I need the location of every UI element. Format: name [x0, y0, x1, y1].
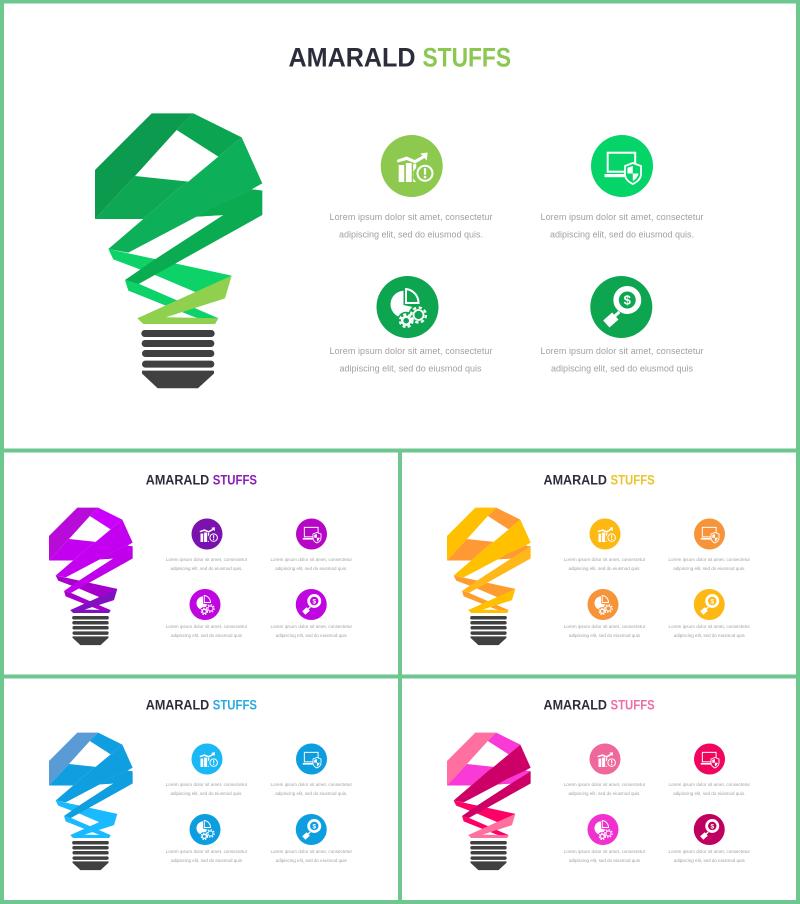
text: item three: adipiscing elit, sed do eiusmod quis: [569, 858, 641, 863]
text: item three: Lorem ipsum dolor sit amet, consectetur: [166, 849, 248, 854]
icon: dollar magnifier: [296, 589, 327, 620]
icon: dollar magnifier: $: [710, 598, 714, 605]
text: item four: Lorem ipsum dolor sit amet, consectetur: [668, 849, 750, 854]
light bulb ribbon illustration: [49, 733, 133, 870]
text: item two: Lorem ipsum dolor sit amet, consectetur: [270, 557, 352, 562]
text: item three: [330, 346, 492, 374]
text: item one: adipiscing elit, sed do eiusmod quis.: [568, 791, 640, 796]
panel: green slide: [95, 43, 704, 388]
text: item two: Lorem ipsum dolor sit amet, consectetur: [540, 212, 704, 222]
text: item two: adipiscing elit, sed do eiusmod quis.: [673, 566, 745, 571]
icon: dollar magnifier: $: [312, 823, 316, 830]
text: item one: Lorem ipsum dolor sit amet, consectetur: [166, 782, 248, 787]
icon: dollar magnifier: [694, 589, 725, 620]
text: item four: [270, 624, 352, 638]
text: item three: adipiscing elit, sed do eiusmod quis: [171, 633, 243, 638]
text: item three: [564, 849, 646, 863]
text: item two: Lorem ipsum dolor sit amet, consectetur: [668, 557, 750, 562]
icon: bar chart alert: [192, 518, 222, 550]
text: item three: Lorem ipsum dolor sit amet, consectetur: [166, 624, 248, 629]
text: item three: adipiscing elit, sed do eiusmod quis: [340, 364, 482, 374]
text: item four: Lorem ipsum dolor sit amet, consectetur: [270, 849, 352, 854]
text: item one: adipiscing elit, sed do eiusmod quis.: [170, 791, 242, 796]
text: item one: Lorem ipsum dolor sit amet, consectetur: [330, 212, 492, 222]
text: item two: [668, 557, 750, 571]
text: item two: adipiscing elit, sed do eiusmod quis.: [275, 791, 347, 796]
text: item two: adipiscing elit, sed do eiusmod quis.: [275, 566, 347, 571]
text: item one: Lorem ipsum dolor sit amet, consectetur: [166, 557, 248, 562]
text: item one: Lorem ipsum dolor sit amet, consectetur: [564, 782, 646, 787]
icon: bar chart alert: [590, 744, 620, 774]
text: item four: adipiscing elit, sed do eiusmod quis: [551, 364, 694, 374]
icon: pie chart gears: [190, 589, 220, 620]
text: item three: Lorem ipsum dolor sit amet, consectetur: [564, 624, 646, 629]
title: STUFFS: [610, 472, 655, 488]
icon: dollar magnifier: $: [710, 823, 714, 830]
light bulb ribbon illustration: [49, 508, 133, 645]
title: AMARALD: [288, 43, 416, 73]
icon: pie chart gears: [588, 589, 618, 620]
text: item two: [668, 782, 750, 796]
text: item one: [166, 557, 248, 571]
title: AMARALD: [544, 698, 607, 712]
text: item one: [166, 782, 248, 796]
text: item three: [564, 624, 646, 638]
icon: laptop shield: [296, 744, 327, 774]
title: STUFFS: [213, 698, 257, 712]
icon: bar chart alert: [192, 744, 222, 774]
text: item four: adipiscing elit, sed do eiusmod quis: [276, 633, 348, 638]
icon: laptop shield: [694, 744, 725, 774]
text: item four: adipiscing elit, sed do eiusmod quis: [674, 858, 746, 863]
light bulb ribbon illustration: [95, 113, 262, 388]
text: item two: Lorem ipsum dolor sit amet, consectetur: [270, 782, 352, 787]
icon: dollar magnifier: $: [624, 293, 632, 308]
text: item four: Lorem ipsum dolor sit amet, consectetur: [668, 624, 750, 629]
text: item four: [540, 346, 704, 374]
text: item two: adipiscing elit, sed do eiusmod quis.: [550, 230, 694, 240]
text: item two: Lorem ipsum dolor sit amet, consectetur: [668, 782, 750, 787]
text: item four: Lorem ipsum dolor sit amet, consectetur: [270, 624, 352, 629]
text: item three: Lorem ipsum dolor sit amet, consectetur: [330, 346, 492, 356]
title: STUFFS: [213, 472, 257, 488]
text: item four: adipiscing elit, sed do eiusmod quis: [276, 858, 348, 863]
title: AMARALD: [146, 472, 209, 488]
text: item four: adipiscing elit, sed do eiusmod quis: [674, 633, 746, 638]
title: AMARALD: [544, 472, 607, 488]
text: item three: [166, 624, 248, 638]
panel: pink slide: [447, 698, 750, 870]
title: STUFFS: [610, 698, 655, 712]
text: item two: [270, 782, 352, 796]
icon: bar chart alert: [590, 518, 620, 550]
icon: dollar magnifier: [590, 276, 652, 338]
light bulb ribbon illustration: [447, 508, 531, 645]
text: item three: [166, 849, 248, 863]
title: AMARALD: [146, 698, 209, 712]
light bulb ribbon illustration: [447, 733, 531, 870]
panel: yellow slide: [447, 472, 750, 645]
icon: laptop shield: [591, 135, 653, 197]
text: item one: [564, 557, 646, 571]
text: item four: [668, 624, 750, 638]
icon: dollar magnifier: $: [312, 598, 316, 605]
text: item two: [270, 557, 352, 571]
text: item four: [668, 849, 750, 863]
text: item one: Lorem ipsum dolor sit amet, consectetur: [564, 557, 646, 562]
text: item two: adipiscing elit, sed do eiusmod quis.: [673, 791, 745, 796]
panel: purple slide: [49, 472, 353, 645]
icon: laptop shield: [296, 518, 327, 550]
icon: bar chart alert: [381, 135, 443, 197]
text: item one: adipiscing elit, sed do eiusmod quis.: [339, 230, 483, 240]
title: STUFFS: [422, 43, 511, 73]
text: item one: [564, 782, 646, 796]
icon: dollar magnifier: [296, 814, 327, 845]
text: item one: adipiscing elit, sed do eiusmod quis.: [568, 566, 640, 571]
text: item two: [540, 212, 704, 240]
text: item three: Lorem ipsum dolor sit amet, consectetur: [564, 849, 646, 854]
text: item four: Lorem ipsum dolor sit amet, consectetur: [540, 346, 704, 356]
text: item three: adipiscing elit, sed do eiusmod quis: [569, 633, 641, 638]
icon: pie chart gears: [190, 814, 220, 845]
panel: blue slide: [49, 698, 353, 870]
icon: pie chart gears: [588, 814, 618, 845]
text: item three: adipiscing elit, sed do eiusmod quis: [171, 858, 243, 863]
icon: dollar magnifier: [694, 814, 725, 845]
text: item one: [330, 212, 492, 240]
icon: laptop shield: [694, 518, 725, 550]
text: item one: adipiscing elit, sed do eiusmod quis.: [170, 566, 242, 571]
text: item four: [270, 849, 352, 863]
icon: pie chart gears: [376, 276, 438, 338]
